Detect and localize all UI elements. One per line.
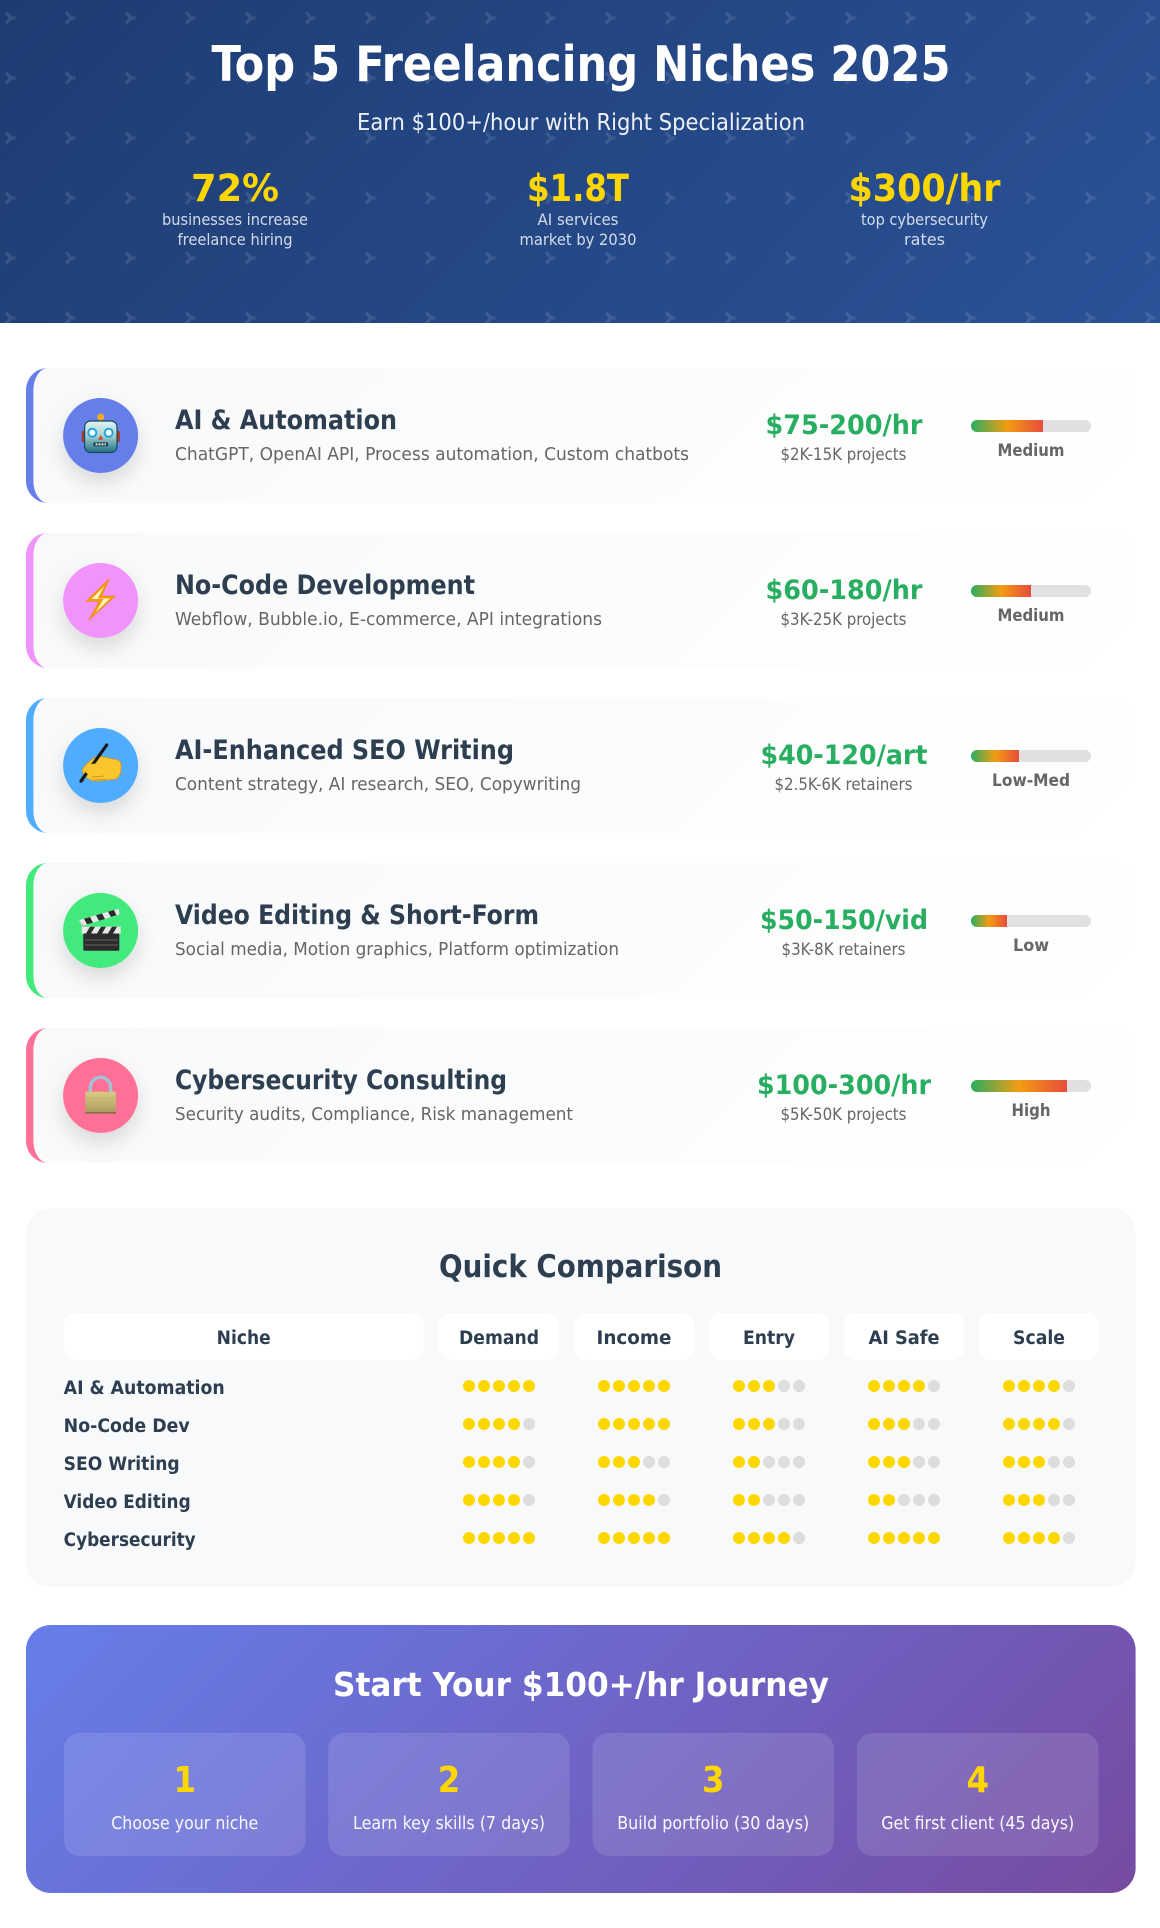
table header: Niche bbox=[217, 1328, 271, 1349]
rate: $75-200/hr bbox=[766, 410, 923, 441]
step 3 bbox=[592, 1733, 834, 1856]
panel: Cybersecurity Consulting bbox=[26, 1028, 1136, 1163]
row: No-Code Dev bbox=[64, 1416, 1075, 1437]
difficulty bar: 80% bbox=[971, 1080, 1091, 1092]
heading: Quick Comparison bbox=[439, 1249, 722, 1285]
niche description: Security audits, Compliance, Risk management bbox=[175, 1104, 573, 1125]
table header: Entry bbox=[743, 1328, 795, 1349]
step 4: Get first client (45 days) bbox=[881, 1813, 1074, 1834]
step 3: Build portfolio (30 days) bbox=[617, 1813, 809, 1834]
rate: $100-300/hr bbox=[757, 1070, 931, 1101]
stat: $1.8T AI services bbox=[520, 167, 636, 249]
difficulty bar: 50% bbox=[971, 585, 1091, 597]
difficulty label: Medium bbox=[998, 441, 1064, 460]
subtitle: Earn $100+/hour with Right Specialization bbox=[357, 108, 805, 136]
step 1: Choose your niche bbox=[111, 1813, 258, 1834]
panel: No-Code Development bbox=[26, 533, 1136, 668]
difficulty bar: 30% bbox=[971, 915, 1091, 927]
project range: $2K-15K projects bbox=[780, 445, 907, 464]
row: AI & Automation: AI & Automation bbox=[64, 1378, 225, 1399]
niche name: AI-Enhanced SEO Writing bbox=[175, 735, 514, 766]
step 2 bbox=[328, 1733, 570, 1856]
stat: $300/hr cybersecurity: $300/hr bbox=[848, 167, 1001, 210]
niche description: Webflow, Bubble.io, E-commerce, API integrations bbox=[175, 609, 602, 630]
project range: $3K-25K projects bbox=[780, 610, 907, 629]
row: Cybersecurity: Cybersecurity bbox=[64, 1530, 196, 1551]
row: AI & Automation bbox=[64, 1378, 1075, 1399]
stat: 72% businesses bbox=[162, 167, 308, 249]
niche name: AI & Automation bbox=[175, 405, 397, 436]
step 2: 2 bbox=[438, 1760, 460, 1801]
step 1 bbox=[64, 1733, 306, 1856]
rate: $40-120/art bbox=[760, 740, 928, 771]
rate: $60-180/hr bbox=[766, 575, 923, 606]
difficulty bar: 40% bbox=[971, 750, 1091, 762]
difficulty label: Medium bbox=[998, 606, 1064, 625]
difficulty label: Low-Med bbox=[992, 771, 1070, 790]
row: Video Editing: Video Editing bbox=[64, 1492, 191, 1513]
difficulty label: Low bbox=[1013, 936, 1049, 955]
niche description: Content strategy, AI research, SEO, Copywriting bbox=[175, 774, 581, 795]
stat: 72% businesses: 72% bbox=[191, 167, 279, 210]
icon: lightning bbox=[63, 563, 138, 638]
niche name: No-Code Development bbox=[175, 570, 475, 601]
step 3: 3 bbox=[702, 1760, 725, 1801]
icon: writing hand bbox=[63, 728, 138, 803]
rate: $50-150/vid bbox=[760, 905, 928, 936]
stat: $300/hr cybersecurity: rates bbox=[904, 230, 945, 249]
header banner bbox=[0, 0, 1160, 323]
icon: robot bbox=[63, 398, 138, 473]
stat: 72% businesses: businesses increase bbox=[162, 210, 308, 229]
stat: $300/hr cybersecurity bbox=[848, 167, 1001, 249]
panel: call to action bbox=[26, 1625, 1136, 1893]
icon: clapperboard bbox=[63, 893, 138, 968]
step 4: 4 bbox=[966, 1760, 989, 1801]
row: Video Editing bbox=[64, 1492, 1075, 1513]
stat: $1.8T AI services: $1.8T bbox=[527, 167, 629, 210]
table header: AI Safe bbox=[868, 1328, 940, 1349]
step 1: 1 bbox=[173, 1760, 196, 1801]
niche description: ChatGPT, OpenAI API, Process automation, Custom chatbots bbox=[175, 444, 689, 465]
panel: AI-Enhanced SEO Writing bbox=[26, 698, 1136, 833]
project range: $5K-50K projects bbox=[780, 1105, 907, 1124]
heading: Start Your $100+/hr Journey bbox=[333, 1665, 829, 1704]
stat: $1.8T AI services: AI services bbox=[538, 210, 618, 229]
panel: AI & Automation bbox=[26, 368, 1136, 503]
table header: Scale bbox=[1013, 1328, 1065, 1349]
retainer range: $2.5K-6K retainers bbox=[774, 775, 913, 794]
difficulty label: High bbox=[1012, 1101, 1050, 1120]
retainer range: $3K-8K retainers bbox=[782, 940, 906, 959]
stat: 72% businesses: freelance hiring bbox=[178, 230, 292, 249]
row: No-Code Dev: No-Code Dev bbox=[64, 1416, 190, 1437]
difficulty bar: 60% bbox=[971, 420, 1091, 432]
table header bbox=[64, 1313, 1099, 1360]
step 2: Learn key skills (7 days) bbox=[353, 1813, 545, 1834]
icon: lock bbox=[63, 1058, 138, 1133]
row: SEO Writing: SEO Writing bbox=[64, 1454, 180, 1475]
step 4 bbox=[857, 1733, 1098, 1856]
panel: quick comparison bbox=[26, 1208, 1136, 1587]
row: Cybersecurity bbox=[64, 1530, 1075, 1551]
niche name: Video Editing & Short-Form bbox=[175, 900, 539, 931]
table header: Demand bbox=[459, 1328, 539, 1349]
niche name: Cybersecurity Consulting bbox=[175, 1065, 507, 1096]
niche description: Social media, Motion graphics, Platform optimization bbox=[175, 939, 619, 960]
table header: Income bbox=[596, 1328, 672, 1349]
row: SEO Writing bbox=[64, 1454, 1075, 1475]
stat: $300/hr cybersecurity: top cybersecurity bbox=[861, 210, 988, 229]
title: Top 5 Freelancing Niches 2025 bbox=[212, 36, 950, 93]
panel: Video Editing & Short-Form bbox=[26, 863, 1136, 998]
stat: $1.8T AI services: market by 2030 bbox=[520, 230, 636, 249]
